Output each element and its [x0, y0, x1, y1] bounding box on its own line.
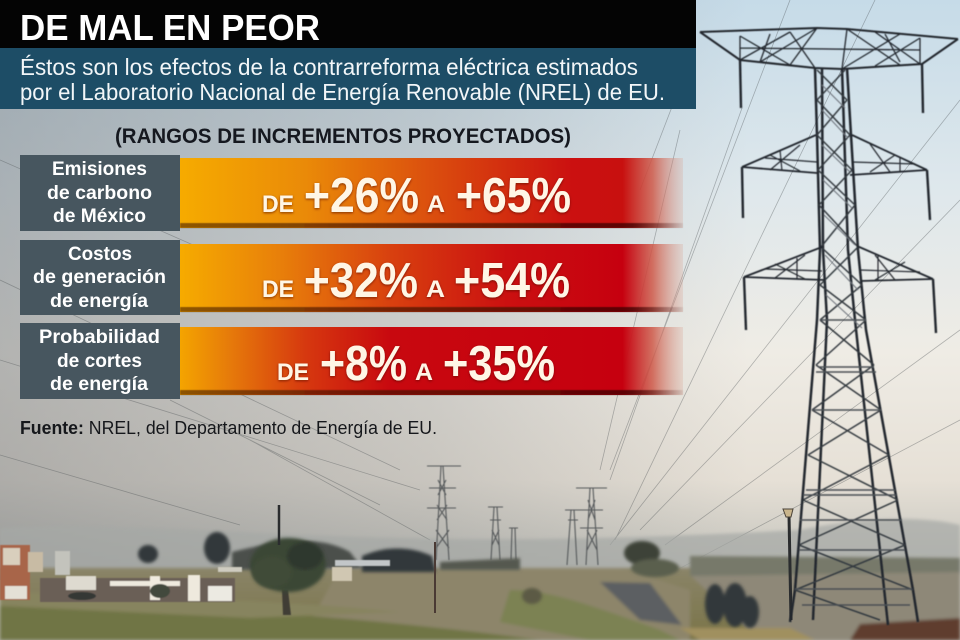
- range heading: (RANGOS DE INCREMENTOS PROYECTADOS): [115, 125, 571, 148]
- houses: [0, 545, 390, 602]
- subtitle line 1: Éstos son los efectos de la contrarreforma eléctrica estimados: [20, 54, 638, 80]
- tower horizontals: [795, 320, 912, 605]
- tower hatch diagonals: [822, 85, 862, 328]
- top crossarm: [700, 28, 958, 113]
- range values: +26%: [304, 169, 419, 223]
- label box: de carbono: [47, 182, 152, 204]
- label box: [20, 155, 180, 231]
- label box: Costos: [68, 243, 132, 265]
- gradient bar: [180, 244, 683, 312]
- label box: Emisiones: [52, 158, 147, 180]
- label box: [20, 323, 180, 399]
- distant pylons: [427, 466, 607, 565]
- label box: de energía: [50, 373, 148, 395]
- range values: A: [427, 191, 445, 218]
- range values: [262, 254, 570, 308]
- subtitle line 2: por el Laboratorio Nacional de Energía Renovable (NREL) de EU.: [20, 79, 665, 105]
- label box: [20, 240, 180, 315]
- landscape ground: [0, 556, 960, 640]
- title: DE MAL EN PEOR: [20, 7, 320, 48]
- range values: DE: [277, 359, 309, 386]
- gradient bar: [180, 327, 683, 395]
- source note: Fuente: NREL, del Departamento de Energía de EU.: [20, 418, 437, 438]
- range values: [262, 169, 571, 223]
- label box: de cortes: [57, 350, 142, 372]
- range values: +8%: [320, 337, 407, 391]
- main transmission tower: [700, 28, 958, 625]
- range values: DE: [262, 191, 294, 218]
- range values: +54%: [454, 254, 570, 308]
- range values: +32%: [304, 254, 418, 308]
- tower bracing: [795, 70, 913, 620]
- tower legs: [790, 68, 918, 625]
- row: generation costs: [20, 240, 683, 315]
- row: carbon emissions: [20, 155, 683, 231]
- label box: de generación: [33, 266, 166, 288]
- range values: [277, 337, 555, 391]
- row: outage probability: [20, 323, 683, 399]
- label box: de México: [53, 205, 146, 227]
- gradient bar: [180, 158, 683, 228]
- range values: DE: [262, 276, 294, 303]
- label box: Probabilidad: [39, 326, 160, 348]
- middle crossarm: [742, 135, 930, 220]
- range values: A: [415, 359, 433, 386]
- tree line: [138, 532, 759, 628]
- distant hills: [0, 519, 960, 575]
- foreground tree: [250, 538, 326, 615]
- lamp posts: [279, 505, 793, 620]
- range values: +35%: [443, 337, 555, 391]
- label box: de energía: [50, 290, 148, 312]
- subtitle banner: [0, 48, 696, 109]
- range values: +65%: [456, 169, 571, 223]
- range values: A: [426, 276, 445, 303]
- title banner: [0, 0, 696, 48]
- lower crossarm: [744, 246, 936, 333]
